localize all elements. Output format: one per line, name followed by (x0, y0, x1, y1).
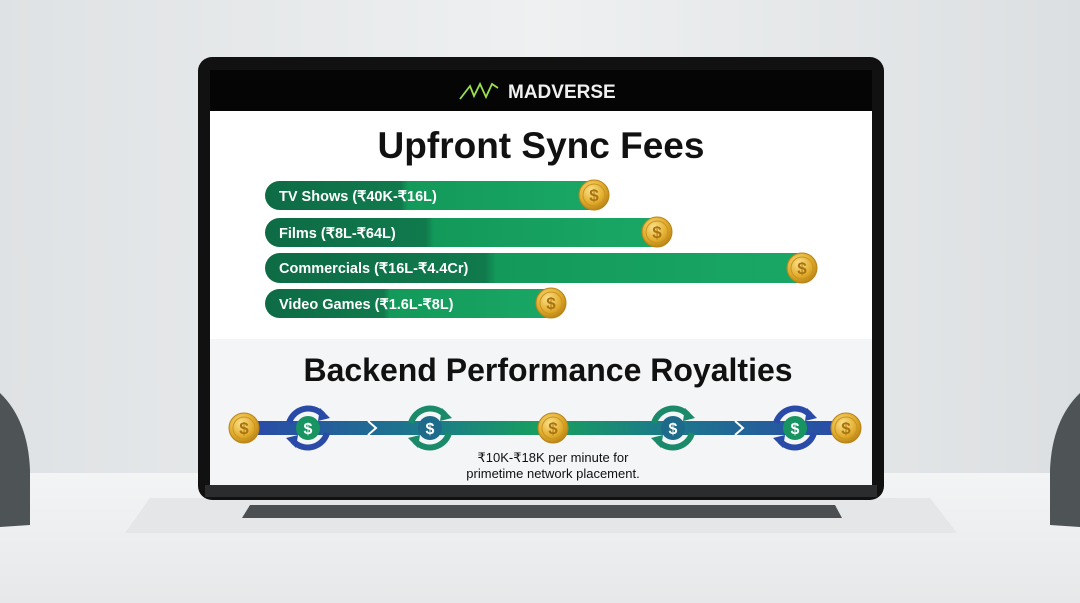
background wall (0, 0, 1080, 473)
icon: cycle 4: $ (791, 421, 800, 438)
heading: Backend Performance Royalties (303, 352, 793, 388)
icon: cycle 2 (408, 408, 452, 448)
laptop deck (125, 498, 957, 533)
icon: madverse logo (460, 84, 498, 99)
bar: Video Games: Video Games (₹1.6L-₹8L) (279, 297, 454, 313)
caption: ₹10K-₹18K per minute for (478, 450, 629, 465)
panel: upfront sync fees (210, 111, 872, 339)
chair right (1050, 393, 1080, 527)
heading: Upfront Sync Fees (378, 125, 704, 166)
icon: cycle 3 (651, 408, 695, 448)
icon: coins (229, 413, 861, 443)
bar: Films: Films (₹8L-₹64L) (279, 226, 396, 242)
brand name: MADVERSE (508, 82, 616, 103)
icon: cycle 1: $ (304, 421, 313, 438)
bar: Films (265, 217, 672, 247)
bar: TV Shows (265, 180, 609, 210)
bar: Commercials: Commercials (₹16L-₹4.4Cr) (279, 261, 468, 277)
icon: cycle 1 (286, 408, 330, 448)
panel: backend performance royalties (210, 339, 872, 485)
icon: cycle 3: $ (669, 421, 678, 438)
bar: TV Shows: TV Shows (₹40K-₹16L) (279, 189, 437, 205)
laptop (125, 57, 957, 533)
bar: Video Games (265, 288, 566, 318)
panel: backend performance royalties: primetime network placement. (466, 466, 640, 481)
icon: cycle 4 (773, 408, 817, 448)
flow line (250, 421, 840, 435)
keyboard (242, 505, 842, 518)
table (0, 473, 1080, 603)
screen bezel (198, 57, 884, 500)
icon: cycle 2: $ (426, 421, 435, 438)
bar: Commercials (265, 253, 817, 283)
header bar (210, 70, 872, 111)
chair left (0, 393, 30, 527)
